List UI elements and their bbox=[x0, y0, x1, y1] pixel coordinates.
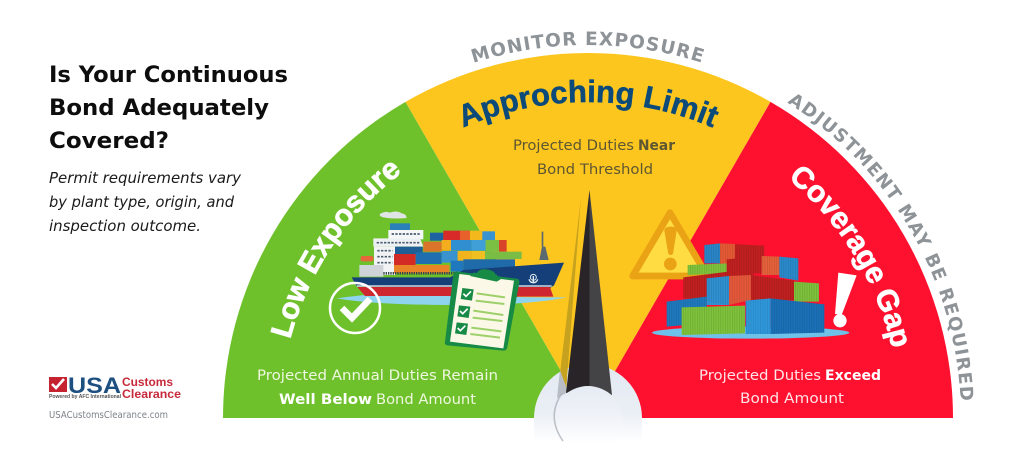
subtitle text: Permit requirements vary bbox=[49, 169, 242, 187]
logo bbox=[49, 373, 181, 421]
label: adjustment may be required: ADJUSTMENT MAY BE REQUIRED bbox=[787, 94, 974, 400]
text: green segment: Well Below bbox=[279, 392, 372, 408]
logo: Powered by AFC International bbox=[49, 394, 122, 400]
panel: red segment bbox=[588, 102, 953, 418]
title bbox=[49, 63, 288, 154]
text: yellow segment bbox=[513, 138, 675, 178]
text: green segment: Projected Annual Duties Remain bbox=[257, 368, 498, 384]
subtitle text bbox=[49, 169, 242, 235]
text: yellow segment: Near bbox=[638, 138, 675, 154]
hub shadow arc bbox=[554, 393, 563, 441]
icon: warning triangle bbox=[633, 213, 707, 276]
icon: container stack bbox=[652, 242, 849, 339]
text: yellow segment: Bond Threshold bbox=[537, 162, 653, 178]
text: green segment bbox=[257, 368, 498, 408]
heading: coverage gap: Coverage Gap bbox=[792, 166, 907, 346]
text: green segment: Bond Amount bbox=[376, 392, 477, 408]
title: Is Your Continuous bbox=[49, 63, 288, 88]
needle bbox=[557, 190, 612, 398]
logo: Clearance bbox=[122, 387, 181, 401]
needle right face bbox=[590, 190, 612, 395]
text: yellow segment: Projected Duties bbox=[513, 138, 634, 154]
panel: green segment bbox=[223, 102, 588, 418]
logo: USA bbox=[68, 373, 121, 398]
icon: check circle bbox=[330, 283, 380, 333]
subtitle text: inspection outcome. bbox=[49, 217, 201, 235]
text: red segment: Bond Amount bbox=[740, 391, 845, 407]
gauge hub inner bbox=[553, 386, 623, 446]
gauge hub outer bbox=[534, 364, 642, 446]
title: Bond Adequately bbox=[49, 96, 269, 121]
heading: low exposure: Low Exposure bbox=[270, 162, 400, 338]
logo: Customs bbox=[122, 375, 173, 389]
needle shadow bbox=[558, 198, 581, 392]
title: Covered? bbox=[49, 129, 169, 154]
icon: clipboard bbox=[445, 269, 519, 351]
text: red segment: Exceed bbox=[825, 368, 881, 384]
icon: cargo ship bbox=[337, 211, 567, 305]
label: monitor exposure: MONITOR EXPOSURE bbox=[471, 32, 704, 62]
needle left face bbox=[566, 190, 590, 393]
heading: approaching limit: Approching Limit bbox=[463, 79, 719, 128]
text: red segment: Projected Duties bbox=[699, 368, 821, 384]
text: red segment bbox=[699, 368, 881, 407]
logo: USACustomsClearance.com bbox=[49, 410, 168, 421]
panel: yellow segment bbox=[406, 53, 770, 418]
subtitle text: by plant type, origin, and bbox=[49, 193, 234, 211]
gauge bbox=[223, 53, 953, 418]
icon: exclamation mark bbox=[833, 273, 857, 327]
